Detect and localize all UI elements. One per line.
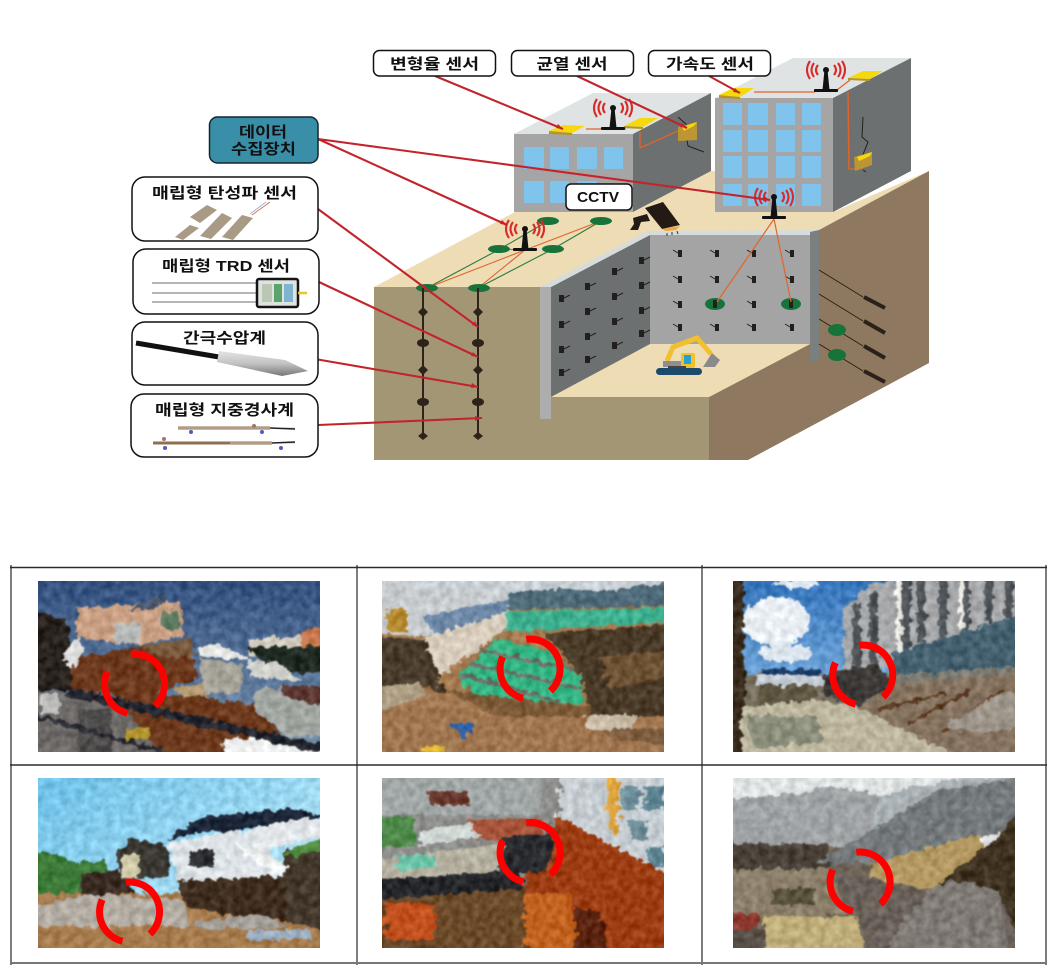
icon: inclinometer rods <box>153 424 295 450</box>
photo: collapsed houses <box>38 778 320 948</box>
label: strain sensor <box>374 50 496 76</box>
photo: collapsed retaining wall with green net <box>382 581 664 752</box>
photo: excavation site with failed slope <box>733 778 1015 948</box>
icon: CCTV camera <box>630 202 680 236</box>
icon: piezometer probe <box>136 343 308 376</box>
label: CCTV: CCTV <box>577 189 619 206</box>
label: crack sensor: 균열 센서 <box>536 56 608 73</box>
wall sensors <box>705 219 801 310</box>
label: acceleration sensor <box>648 50 770 76</box>
panel: piezometer: 간극수압계 <box>183 330 266 347</box>
panel: buried TRD sensor <box>133 249 319 314</box>
label: CCTV <box>566 184 632 210</box>
label: acceleration sensor: 가속도 센서 <box>666 56 754 73</box>
panel: buried elastic wave sensor: 매립형 탄성파 센서 <box>152 185 297 202</box>
photo: failed retaining wall by apartments <box>733 581 1015 752</box>
photo: landslide behind railing <box>38 581 320 752</box>
panel: piezometer <box>132 322 318 385</box>
antenna on building 1 <box>594 99 632 130</box>
photo: deep excavation collapse by apartments <box>382 778 664 948</box>
antenna on building 2 <box>807 61 845 92</box>
marker: photo 1 <box>105 654 165 713</box>
marker: photo 2 <box>500 639 560 698</box>
panel: buried inclinometer <box>131 394 318 457</box>
label: data logger: 데이터 <box>239 124 287 141</box>
ground anchors on right face <box>819 270 885 382</box>
marker: photo 6 <box>830 852 890 911</box>
label: data logger: 수집장치 <box>231 141 296 158</box>
building 2 <box>715 58 911 212</box>
marker: photo 3 <box>833 645 893 704</box>
panel: buried inclinometer: 매립형 지중경사계 <box>155 402 294 419</box>
wall anchors <box>559 250 794 376</box>
red leader lines <box>315 76 770 425</box>
label: data logger <box>210 117 318 163</box>
diagram: monitored excavation site <box>131 50 929 460</box>
label: strain sensor: 변형율 센서 <box>390 56 479 73</box>
icon: TRD probe <box>152 279 307 307</box>
antennas with signal waves <box>506 61 845 251</box>
antenna on ground surface <box>506 220 544 251</box>
antenna at building 2 base <box>755 188 793 219</box>
panel: buried elastic wave sensor <box>132 177 318 241</box>
label: crack sensor <box>512 50 634 76</box>
panel: buried TRD sensor: 매립형 TRD 센서 <box>162 258 290 275</box>
red circle markers <box>100 639 893 941</box>
building 1 <box>514 93 711 212</box>
icon: elastic wave sensor plates <box>175 202 270 240</box>
buried probes <box>417 288 484 440</box>
ground surface sensors and wiring <box>416 217 612 292</box>
photo table of collapse sites <box>10 565 1047 965</box>
marker: photo 5 <box>500 822 560 882</box>
icon: excavator <box>656 338 720 375</box>
marker: photo 4 <box>100 882 160 941</box>
ground block <box>374 171 929 460</box>
